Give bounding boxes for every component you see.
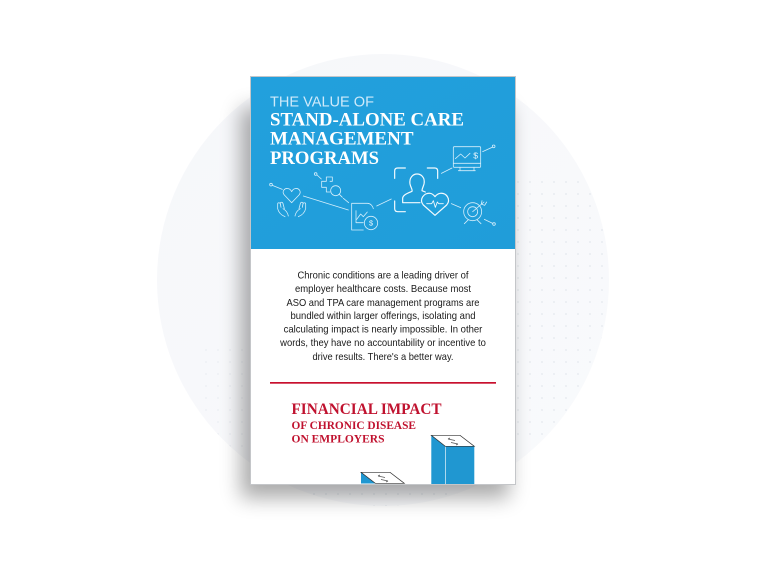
icon: person and heart in frame (395, 168, 449, 215)
title: PROGRAMS (270, 148, 379, 169)
intro paragraph (279, 271, 486, 363)
icon: monitor with chart (441, 145, 495, 173)
title (270, 94, 464, 169)
divider (270, 382, 496, 384)
section heading (292, 401, 442, 446)
intro paragraph: drive results. There's a better way. (312, 352, 454, 363)
intro paragraph: words, they have no accountability or incentive to (279, 338, 486, 349)
icon: medical search (314, 173, 349, 203)
card shadow (241, 108, 509, 498)
icon: monitor with chart: $ (473, 151, 478, 161)
icon: document with dollar (352, 199, 391, 230)
infographic preview card on background (157, 54, 603, 510)
bar chart (361, 435, 474, 484)
short bar (361, 472, 404, 484)
icon: document with dollar: $ (369, 218, 373, 227)
dot pattern (195, 175, 609, 508)
icon: heart in hands (270, 183, 306, 217)
title: THE VALUE OF (270, 94, 374, 110)
card (250, 76, 516, 484)
intro paragraph: calculating impact is nearly impossible. In other (284, 325, 483, 336)
section heading: FINANCIAL IMPACT (292, 401, 442, 418)
icon: target with arrow (451, 201, 495, 225)
connector (303, 196, 348, 210)
background circle (157, 54, 609, 506)
intro paragraph: employer healthcare costs. Because most (295, 284, 471, 295)
intro paragraph: bundled within larger offerings, isolating and (290, 311, 476, 322)
header panel (251, 77, 515, 249)
tall bar (431, 435, 474, 484)
intro paragraph: Chronic conditions are a leading driver of (298, 271, 469, 282)
section heading: ON EMPLOYERS (292, 434, 384, 446)
section heading: OF CHRONIC DISEASE (292, 420, 416, 432)
title: STAND-ALONE CARE (270, 110, 464, 130)
intro paragraph: ASO and TPA care management programs are (286, 298, 480, 309)
icon network (270, 145, 495, 230)
title: MANAGEMENT (270, 129, 414, 150)
